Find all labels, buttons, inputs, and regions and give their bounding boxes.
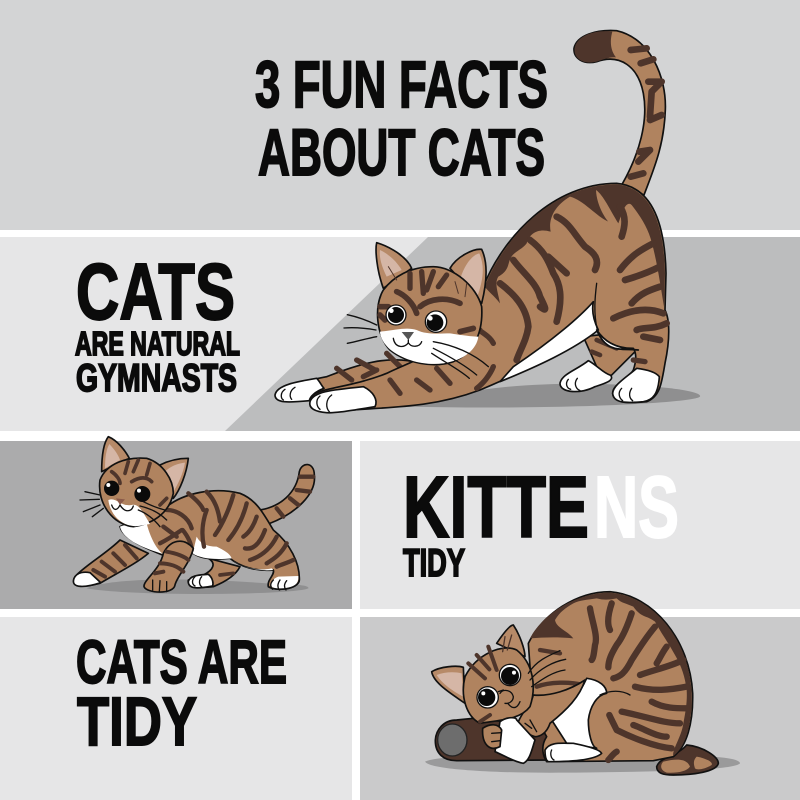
hip line	[595, 283, 597, 330]
panel: gymnasts background	[0, 237, 800, 431]
whiskers	[528, 651, 566, 687]
far front leg	[275, 353, 420, 402]
arm	[518, 680, 585, 737]
panel: kittens text background	[360, 441, 800, 609]
illustration: curled cat with toy	[425, 592, 740, 775]
cat tail	[657, 745, 718, 775]
eyes	[499, 664, 521, 686]
cat body	[310, 183, 669, 413]
title	[255, 47, 548, 189]
back dark band	[485, 184, 665, 307]
heading: cats are natural gymnasts: GYMNASTS	[76, 357, 237, 400]
far hind leg	[560, 333, 637, 392]
whiskers	[80, 492, 167, 527]
near hind paw	[613, 368, 659, 402]
cardboard tube toy	[435, 718, 553, 761]
heading: kittens tidy: KITTE	[403, 459, 589, 556]
curled body	[518, 592, 693, 762]
near front leg	[144, 541, 193, 592]
dark back	[530, 593, 692, 756]
illustration: walking kitten	[73, 437, 315, 594]
heading: cats are tidy	[76, 628, 287, 760]
curled cat head	[432, 625, 566, 723]
ground shadow	[407, 384, 700, 408]
title: 3 FUN FACTS	[255, 47, 548, 121]
white mitt	[483, 718, 535, 763]
panel: title background	[0, 0, 800, 230]
tail	[260, 465, 315, 524]
kitten body	[120, 491, 299, 592]
ground shadow	[425, 756, 740, 773]
ground shadow	[87, 580, 308, 594]
heading: cats are tidy: TIDY	[77, 683, 197, 760]
nose and mouth	[402, 332, 414, 340]
heading: kittens tidy: TIDY	[403, 542, 465, 585]
illustration: stretching cat	[275, 30, 700, 413]
cat head	[344, 243, 488, 378]
nose and mouth	[116, 498, 125, 505]
far hind leg	[188, 558, 240, 588]
nose and mouth	[498, 690, 520, 708]
belly white	[500, 302, 598, 382]
whiskers	[344, 315, 488, 378]
eyes	[386, 305, 406, 325]
title: ABOUT CATS	[258, 115, 545, 189]
heading: cats are natural gymnasts	[75, 247, 240, 400]
near front paw	[310, 387, 376, 413]
eyes	[104, 481, 119, 496]
body stripes	[590, 603, 687, 760]
far front leg	[73, 540, 148, 586]
heading: kittens tidy: NS	[594, 459, 679, 556]
body stripes	[500, 217, 597, 360]
white chest	[552, 678, 607, 748]
panel: tidy text background	[0, 617, 352, 800]
heading: cats are tidy: CATS ARE	[76, 628, 287, 696]
tail	[574, 30, 665, 195]
heading: cats are natural gymnasts: ARE NATURAL	[75, 325, 240, 362]
panel: kitten illustration background	[0, 441, 352, 609]
rear paw white	[545, 743, 602, 762]
panel: curled cat background	[360, 617, 800, 800]
heading: cats are natural gymnasts: CATS	[76, 247, 235, 336]
kitten head	[80, 437, 188, 527]
